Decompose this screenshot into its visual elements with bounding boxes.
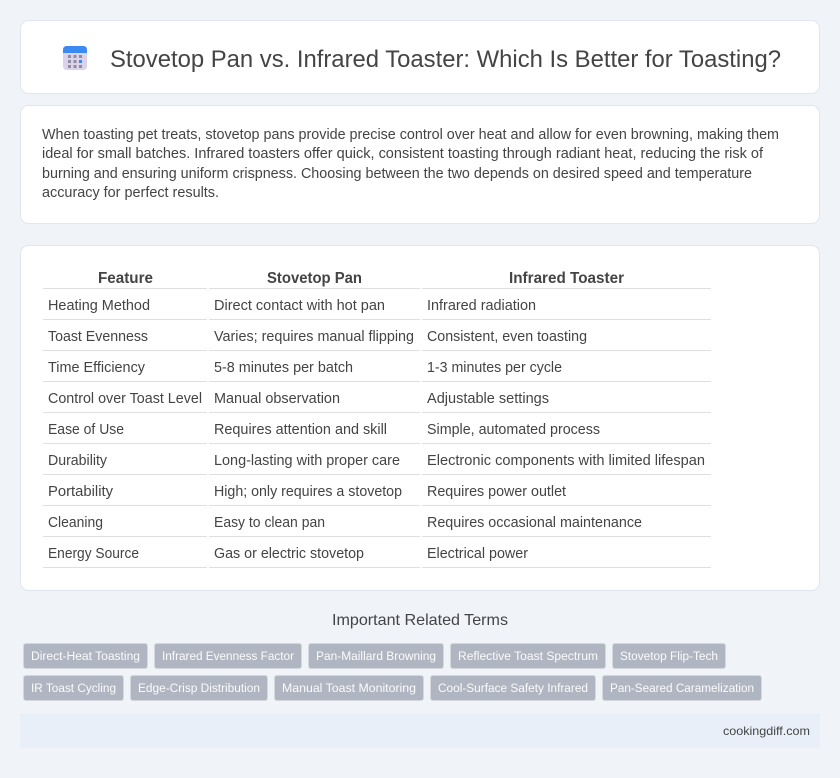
- text block: introduction: [42, 127, 779, 201]
- row: portability: High; only requires a stovetop: [214, 484, 402, 500]
- tag: Direct-Heat Toasting: [31, 649, 140, 663]
- table header: Stovetop Pan: [267, 270, 362, 287]
- tag: [602, 676, 762, 700]
- row: portability: Portability: [48, 484, 114, 500]
- row: durability: Durability: [48, 453, 108, 469]
- row: toast evenness: Toast Evenness: [48, 329, 148, 345]
- row: ease of use: Requires attention and skill: [214, 422, 387, 438]
- tag: [24, 676, 124, 700]
- row: ease of use: [48, 422, 600, 438]
- text block: introduction: accuracy for perfect results.: [42, 185, 219, 201]
- row: toast evenness: [48, 329, 587, 345]
- row: durability: [48, 453, 705, 469]
- tag: Pan-Seared Caramelization: [610, 681, 754, 695]
- row: control over toast level: Control over Toast Level: [48, 391, 202, 407]
- tag: Cool-Surface Safety Infrared: [438, 681, 588, 695]
- table header: Infrared Toaster: [509, 270, 624, 287]
- tag: Reflective Toast Spectrum: [458, 649, 598, 663]
- row: ease of use: Ease of Use: [48, 422, 124, 438]
- tag: [154, 644, 302, 668]
- tag: [130, 676, 268, 700]
- title: Stovetop Pan vs. Infrared Toaster: Which Is Better for Toasting?: [110, 46, 781, 73]
- table header: [98, 270, 624, 287]
- row: energy source: Energy Source: [48, 546, 139, 562]
- text block: introduction: burning and ensuring uniform crispness. Choosing between the two depends on desired speed and temperature: [42, 166, 752, 182]
- row: heating method: [48, 298, 536, 314]
- tag: Stovetop Flip-Tech: [620, 649, 718, 663]
- row: energy source: [48, 546, 528, 562]
- tag: IR Toast Cycling: [31, 681, 116, 695]
- row: energy source: Gas or electric stovetop: [214, 546, 364, 562]
- row: ease of use: Simple, automated process: [427, 422, 600, 438]
- row: heating method: Heating Method: [48, 298, 150, 314]
- row: time efficiency: [48, 360, 562, 376]
- tag list: [24, 644, 762, 700]
- row: control over toast level: [48, 391, 549, 407]
- text block: introduction: ideal for small batches. Infrared toasters offer quick, consistent toasting through radiant heat, reducing the risk of: [42, 146, 764, 162]
- tag: [308, 644, 444, 668]
- row: time efficiency: 5-8 minutes per batch: [214, 360, 353, 376]
- row: durability: Long-lasting with proper care: [214, 453, 400, 469]
- tag: Infrared Evenness Factor: [162, 649, 294, 663]
- row: portability: Requires power outlet: [427, 484, 566, 500]
- row: time efficiency: 1-3 minutes per cycle: [427, 360, 562, 376]
- footer: [20, 714, 820, 748]
- row: cleaning: Cleaning: [48, 515, 103, 531]
- row: heating method: Infrared radiation: [427, 298, 536, 314]
- row: control over toast level: Adjustable settings: [427, 391, 549, 407]
- tag: [24, 644, 148, 668]
- panel: comparison table: [20, 246, 820, 590]
- row: toast evenness: Varies; requires manual flipping: [214, 329, 414, 345]
- row: cleaning: Requires occasional maintenance: [427, 515, 642, 531]
- tag: [612, 644, 726, 668]
- table header: Feature: [98, 270, 153, 287]
- panel: header: [20, 20, 820, 94]
- row: durability: Electronic components with limited lifespan: [427, 453, 705, 469]
- row: control over toast level: Manual observation: [214, 391, 340, 407]
- row: energy source: Electrical power: [427, 546, 528, 562]
- row: portability: [48, 484, 566, 500]
- tag: [430, 676, 596, 700]
- heading: important related terms: Important Related Terms: [332, 612, 508, 629]
- tag: Manual Toast Monitoring: [282, 681, 416, 695]
- tag: Edge-Crisp Distribution: [138, 681, 260, 695]
- tag: [450, 644, 606, 668]
- icon: calendar: [63, 46, 87, 70]
- tag: Pan-Maillard Browning: [316, 649, 436, 663]
- row: toast evenness: Consistent, even toasting: [427, 329, 587, 345]
- row: cleaning: [48, 515, 642, 531]
- tag: [274, 676, 424, 700]
- footer source: cookingdiff.com: [723, 724, 810, 738]
- row: time efficiency: Time Efficiency: [48, 360, 146, 376]
- text block: introduction: When toasting pet treats, stovetop pans provide precise control over heat and allow for even browning, making them: [42, 127, 779, 143]
- panel: introduction: [20, 106, 820, 224]
- row: heating method: Direct contact with hot pan: [214, 298, 385, 314]
- row: cleaning: Easy to clean pan: [214, 515, 325, 531]
